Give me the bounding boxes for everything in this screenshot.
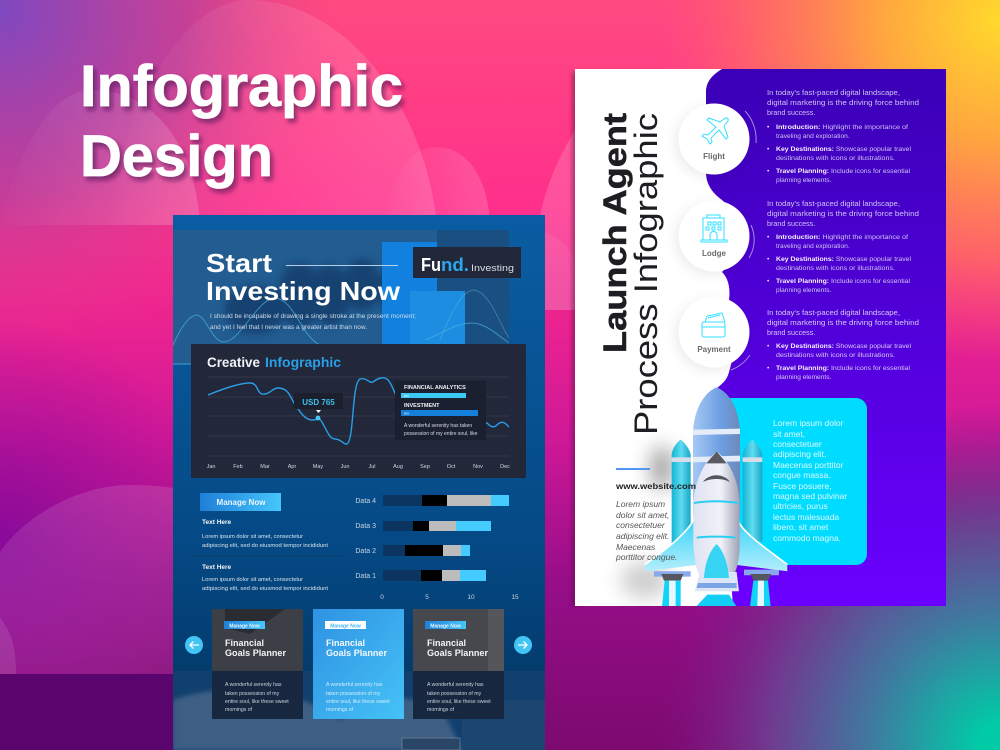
card: financial goals planner 3: A wonderful serenity has	[427, 682, 484, 688]
card: financial goals planner 3: Financial	[427, 638, 466, 648]
panel: creative infographic chart: Creative	[207, 354, 260, 370]
card: financial goals planner 2: Goals Planner	[326, 648, 387, 658]
cyan text panel: magna sed pulvinar	[773, 491, 847, 501]
main title	[80, 54, 403, 189]
text block 2: Travel Planning: Include icons for essential	[776, 278, 911, 285]
card: financial goals planner 2: taken possession of my	[326, 691, 381, 697]
arc: lodge	[749, 225, 754, 258]
month axis labels: Apr	[288, 464, 296, 470]
cyan text panel: Fusce posuere,	[773, 481, 832, 491]
card: financial goals planner 2: mornings of	[326, 707, 354, 713]
stacked bar chart: 5	[425, 594, 429, 601]
card: financial goals planner 3: taken possession of my	[427, 691, 482, 697]
card: financial goals planner 1: entire soul, like these sweet	[225, 699, 289, 705]
heading	[206, 254, 400, 306]
cyan text panel: consectetuer	[773, 439, 822, 449]
cyan text panel: libero, sit amet	[773, 522, 829, 532]
text block 2: planning elements.	[776, 287, 832, 294]
stacked bar chart: 0	[380, 594, 384, 601]
card: financial goals planner 3	[413, 609, 504, 719]
text block 2: digital marketing is the driving force behind	[767, 209, 919, 218]
arrow: next	[514, 636, 532, 654]
subtitle text	[210, 313, 416, 331]
website block: Lorem ipsum	[616, 499, 665, 509]
financial analytics overlay: A wonderful serenity has taken	[404, 423, 472, 429]
text block 1: Introduction: Highlight the importance of	[776, 124, 908, 131]
main title: Design	[80, 124, 273, 189]
text block 1: traveling and exploration.	[776, 133, 850, 140]
website block: dolor sit amet,	[616, 510, 669, 520]
text blocks: Text Here	[202, 519, 232, 526]
card: financial goals planner 3: Manage Now	[430, 624, 461, 630]
text block 3: digital marketing is the driving force behind	[767, 318, 919, 327]
text block 1: •	[767, 124, 770, 131]
financial analytics overlay	[395, 381, 486, 440]
panel: launch agent poster	[575, 69, 946, 607]
card: financial goals planner 1: taken possession of my	[225, 691, 280, 697]
text block 1	[767, 88, 919, 184]
text block 2: Key Destinations: Showcase popular travel	[776, 256, 912, 263]
card: financial goals planner 2: Manage Now	[330, 624, 361, 630]
month axis labels: Jul	[368, 464, 376, 470]
text blocks: Lorem ipsum dolor sit amet, consectetur	[202, 534, 303, 540]
text block 3	[767, 308, 919, 381]
financial analytics overlay: 80%	[404, 412, 410, 416]
website block: consectetuer	[616, 520, 666, 530]
text block 1: •	[767, 168, 770, 175]
rocket shadow	[621, 446, 673, 598]
circle: lodge	[678, 200, 750, 272]
vertical title	[597, 113, 664, 435]
logo	[413, 247, 521, 278]
header photo with charts	[173, 230, 509, 364]
card: financial goals planner 3: entire soul, like these sweet	[427, 699, 491, 705]
card: financial goals planner 2: entire soul, like these sweet	[326, 699, 390, 705]
month axis labels	[206, 464, 510, 469]
card: financial goals planner 3: mornings of	[427, 707, 455, 713]
line chart	[208, 378, 509, 444]
stacked bar chart: Data 1	[355, 573, 376, 580]
card: financial goals planner 1: Manage Now	[229, 624, 260, 630]
text block 1: In today's fast-paced digital landscape,	[767, 88, 900, 97]
text blocks: Lorem ipsum dolor sit amet, consectetur	[202, 577, 303, 583]
website block: adipiscing elit.	[616, 531, 669, 541]
logo: Investing	[471, 263, 514, 274]
text block 1: destinations with icons or illustrations.	[776, 155, 895, 162]
tooltip: USD 765	[302, 398, 335, 407]
text block 1: brand success.	[767, 108, 815, 117]
website block	[615, 468, 696, 562]
heading: Investing Now	[206, 276, 401, 306]
card: financial goals planner 2: A wonderful serenity has	[326, 682, 383, 688]
bottom photo	[173, 671, 545, 750]
text blocks: adipiscing elit, sed do eiusmod tempor incididunt	[202, 586, 328, 592]
subtitle text: and yet I feel that I never was a greater artist than now.	[210, 324, 367, 331]
text block 2: Introduction: Highlight the importance of	[776, 234, 908, 241]
icon: credit cards	[702, 313, 725, 337]
month axis labels: Dec	[500, 464, 510, 470]
month axis labels: Nov	[473, 464, 483, 470]
card: financial goals planner 1: mornings of	[225, 707, 253, 713]
circle: payment: Payment	[697, 345, 731, 354]
panel: creative infographic chart: Infographic	[265, 354, 341, 370]
text block 3: •	[767, 365, 770, 372]
text block 3: Travel Planning: Include icons for essential	[776, 365, 911, 372]
cyan text panel: ultricies, purus	[773, 501, 828, 511]
stacked bar chart	[355, 495, 519, 601]
stacked bar chart: 15	[511, 594, 519, 601]
month axis labels: Feb	[233, 464, 243, 470]
main title: Infographic	[80, 54, 403, 119]
text blocks	[192, 519, 343, 592]
card: financial goals planner 2	[313, 609, 404, 719]
text block 3: Key Destinations: Showcase popular travel	[776, 343, 912, 350]
website block: www.website.com	[615, 482, 696, 491]
circle: lodge: Lodge	[702, 249, 727, 258]
text block 2: •	[767, 234, 770, 241]
logo: nd.	[441, 255, 469, 275]
icon: hotel	[701, 215, 727, 242]
tooltip	[294, 393, 343, 413]
website block: Maecenas	[616, 542, 656, 552]
month axis labels: Aug	[393, 464, 403, 470]
card: financial goals planner 3: Goals Planner	[427, 648, 488, 658]
stacked bar chart: Data 2	[355, 548, 376, 555]
text block 1: Travel Planning: Include icons for essential	[776, 168, 911, 175]
month axis labels: Jan	[207, 464, 215, 470]
text block 1: digital marketing is the driving force behind	[767, 98, 919, 107]
text block 2: brand success.	[767, 219, 815, 228]
manage now button: Manage Now	[217, 498, 266, 507]
cyan text panel: Maecenas porttitor	[773, 460, 844, 470]
vertical title: Process Infographic	[628, 113, 664, 435]
month axis labels: Jun	[341, 464, 349, 470]
text blocks: Text Here	[202, 564, 232, 571]
financial analytics overlay: INVESTMENT	[404, 403, 440, 409]
circle: flight: Flight	[703, 152, 725, 161]
icon: airplane	[702, 118, 728, 144]
icon: rocket	[645, 387, 787, 607]
financial analytics overlay: 80%	[404, 395, 410, 398]
cyan text panel: Lorem ipsum dolor	[773, 418, 844, 428]
card: financial goals planner 1: A wonderful serenity has	[225, 682, 282, 688]
poster shadow	[572, 72, 582, 606]
text block 1: Key Destinations: Showcase popular travel	[776, 146, 912, 153]
text block 3: In today's fast-paced digital landscape,	[767, 308, 900, 317]
text block 2: •	[767, 278, 770, 285]
purple wave panel	[706, 69, 946, 606]
cyan text panel: adipiscing elit.	[773, 449, 826, 459]
text block 3: destinations with icons or illustrations.	[776, 352, 895, 359]
cyan text panel: congue massa.	[773, 470, 831, 480]
text block 3: •	[767, 343, 770, 350]
month axis labels: Oct	[447, 464, 456, 470]
cyan text panel	[718, 398, 867, 565]
heading: Start	[206, 248, 272, 278]
text block 3: brand success.	[767, 328, 815, 337]
text block 2: traveling and exploration.	[776, 243, 850, 250]
month axis labels: May	[313, 464, 323, 470]
manage now button	[200, 493, 281, 511]
text block 3: planning elements.	[776, 374, 832, 381]
stacked bar chart: Data 4	[355, 498, 376, 505]
stacked bar chart: Data 3	[355, 523, 376, 530]
text block 1: planning elements.	[776, 177, 832, 184]
text blocks: adipiscing elit, sed do eiusmod tempor incididunt	[202, 543, 328, 549]
arc: payment	[731, 355, 750, 370]
cyan text panel: commodo magna.	[773, 533, 841, 543]
month axis labels: Sep	[420, 464, 430, 470]
card: financial goals planner 1: Goals Planner	[225, 648, 286, 658]
stacked bar chart: 10	[467, 594, 475, 601]
month axis labels: Mar	[260, 464, 270, 470]
card: financial goals planner 1: Financial	[225, 638, 264, 648]
financial analytics overlay: FINANCIAL ANALYTICS	[404, 385, 466, 391]
cyan text panel: lectus malesuada	[773, 512, 839, 522]
logo: Fu	[421, 255, 441, 275]
circle: payment	[678, 296, 750, 368]
text block 2	[767, 199, 919, 294]
text block 2: •	[767, 256, 770, 263]
text block 2: In today's fast-paced digital landscape,	[767, 199, 900, 208]
panel: fund investing poster	[173, 215, 545, 750]
vertical title: Launch Agent	[597, 113, 633, 353]
cyan text panel: sit amet,	[773, 429, 805, 439]
website block: porttitor congue.	[615, 552, 677, 562]
text block 2: destinations with icons or illustrations.	[776, 265, 895, 272]
arc: flight	[745, 111, 756, 143]
financial analytics overlay: possession of my entire soul, like	[404, 431, 478, 437]
arrow: previous	[185, 636, 203, 654]
text block 1: •	[767, 146, 770, 153]
panel: creative infographic chart	[191, 344, 526, 478]
subtitle text: I should be incapable of drawing a single stroke at the present moment;	[210, 313, 416, 320]
card: financial goals planner 2: Financial	[326, 638, 365, 648]
card: financial goals planner 1	[212, 609, 303, 719]
circle: flight	[678, 104, 750, 174]
